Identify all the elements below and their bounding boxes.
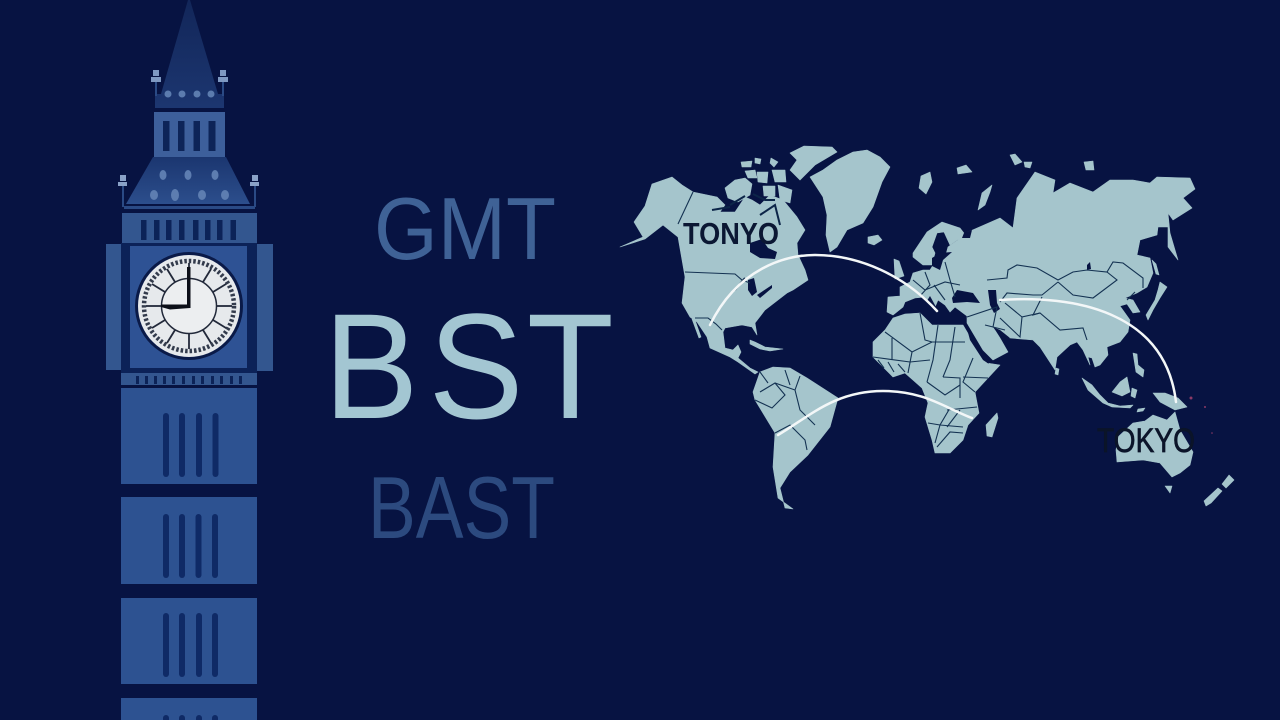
north america [620, 177, 808, 374]
clock upper band [122, 213, 257, 243]
GMT label: GMT [374, 179, 556, 278]
eurasia [887, 172, 1195, 370]
japan and sakhalin [1146, 260, 1167, 320]
arc: south america to east africa [778, 391, 972, 435]
sri lanka [1055, 368, 1059, 375]
land masses [620, 146, 1234, 509]
time zone labels [324, 179, 614, 557]
south america [753, 367, 838, 509]
tiny pink marks [1190, 396, 1213, 434]
tower spire [151, 0, 228, 108]
baffin and arctic islands [725, 146, 837, 203]
madagascar [986, 413, 998, 437]
arctic russia islands [919, 154, 1094, 210]
australia [1116, 412, 1193, 477]
greenland [810, 150, 890, 252]
BAST label: BAST [368, 458, 555, 557]
country borders [678, 192, 1143, 450]
belfry windows [154, 112, 225, 157]
BST label: BST [324, 284, 614, 451]
canadian arctic channels [712, 194, 780, 290]
clock face [135, 252, 243, 360]
inland seas [748, 230, 1091, 364]
scandinavia [913, 222, 967, 265]
arc: north america to europe [710, 255, 937, 325]
city label: TOKYO: TOKYO [1097, 422, 1195, 460]
tower bead band [121, 373, 257, 385]
seas and borders [678, 192, 1143, 450]
tower shaft panels [121, 388, 257, 720]
caribbean [750, 340, 783, 351]
baja california [692, 319, 701, 338]
clock housing with side pillars [106, 243, 273, 373]
big ben tower [106, 0, 273, 720]
africa [873, 313, 1000, 453]
tasmania and new zealand [1165, 475, 1234, 506]
city label: TONYO: TONYO [683, 216, 779, 251]
iceland [868, 235, 882, 245]
flight arcs [710, 255, 1176, 435]
british isles [894, 259, 904, 279]
southeast asia islands [1082, 353, 1187, 412]
clock hands [161, 267, 190, 310]
world map [620, 146, 1234, 509]
arc: central asia to australia [1000, 299, 1176, 402]
lower roof [118, 157, 259, 209]
